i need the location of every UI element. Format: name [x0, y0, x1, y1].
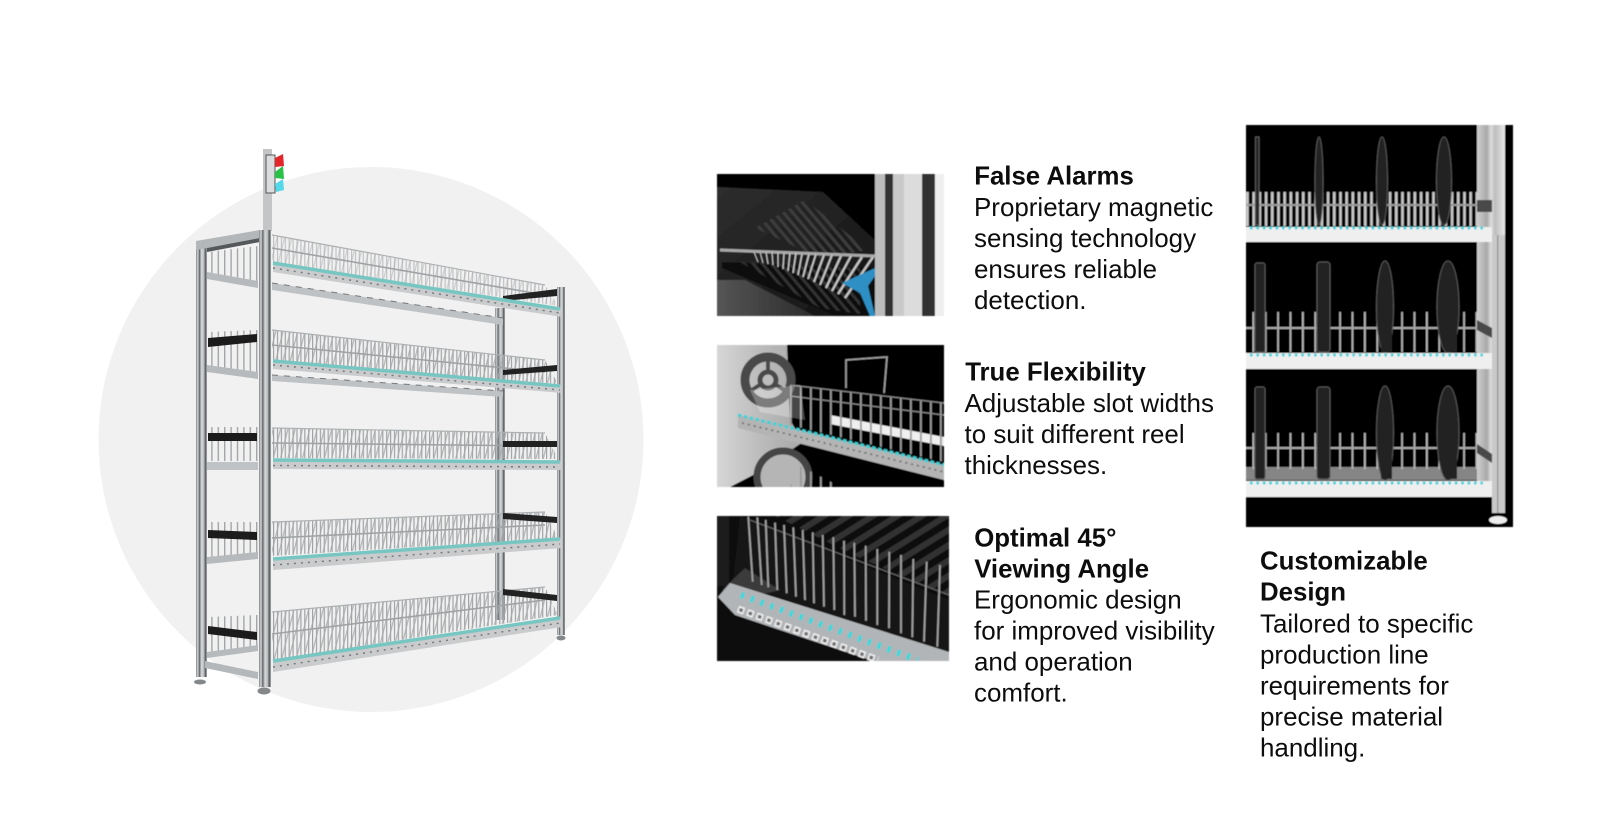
text: Optimal 45 degree Viewing Angle: Viewing Angle: [974, 556, 1149, 584]
text: Optimal 45 degree Viewing Angle: Optimal 45°: [974, 524, 1116, 552]
text: True Flexibility: True Flexibility: [965, 358, 1146, 386]
text: Customizable Design: Tailored to specific: [1260, 610, 1473, 638]
rack front post and signal pole: [258, 149, 272, 694]
photo: customizable rack front view: [1246, 125, 1513, 527]
text: True Flexibility: thicknesses.: [964, 452, 1107, 480]
text: Customizable Design: [1260, 548, 1473, 762]
rack shelves with teal indicators: [273, 262, 562, 672]
text: Customizable Design: Customizable: [1260, 548, 1428, 576]
rack right post: [556, 287, 566, 640]
background circle: [98, 167, 644, 712]
text: Customizable Design: requirements for: [1260, 672, 1449, 700]
text: False Alarms: False Alarms: [974, 162, 1134, 190]
reels: [1255, 137, 1459, 480]
text: False Alarms: detection.: [974, 287, 1086, 315]
shelf edges with cyan indicators: [1246, 227, 1492, 497]
text: Customizable Design: Design: [1260, 578, 1346, 606]
text: Optimal 45 degree Viewing Angle: Ergonomic design: [974, 586, 1182, 614]
rack rear beams and black side bars: [207, 272, 557, 658]
text: False Alarms: Proprietary magnetic: [974, 194, 1213, 222]
photo: adjustable slot widths close-up: [717, 345, 944, 503]
text: True Flexibility: Adjustable slot widths: [964, 390, 1214, 418]
text: False Alarms: ensures reliable: [974, 256, 1157, 284]
icon: three-colour signal light: [266, 154, 284, 193]
text: Customizable Design: handling.: [1260, 734, 1365, 762]
text: True Flexibility: [964, 358, 1214, 480]
product: reel storage rack: [194, 149, 566, 694]
rack rear posts: [194, 230, 505, 684]
text: True Flexibility: to suit different reel: [964, 421, 1185, 449]
text: Optimal 45 degree Viewing Angle: and operation: [974, 648, 1133, 676]
rack wire dividers: [208, 235, 558, 660]
text: Optimal 45 degree Viewing Angle: for improved visibility: [974, 618, 1215, 646]
text: Optimal 45 degree Viewing Angle: [974, 524, 1215, 708]
photo: magnetic sensing close-up: [717, 174, 944, 316]
photo: 45 degree viewing angle close-up: [717, 516, 949, 661]
rack upright in photo: [1477, 125, 1507, 524]
text: False Alarms: sensing technology: [974, 225, 1196, 253]
text: False Alarms: [974, 162, 1213, 315]
text: Optimal 45 degree Viewing Angle: comfort.: [974, 680, 1068, 708]
text: Customizable Design: production line: [1260, 642, 1429, 670]
wire combs: [1246, 192, 1477, 480]
text: Customizable Design: precise material: [1260, 704, 1443, 732]
